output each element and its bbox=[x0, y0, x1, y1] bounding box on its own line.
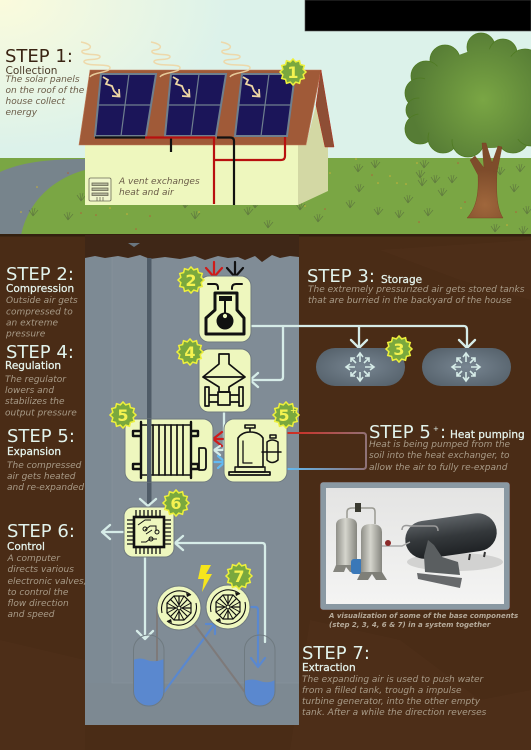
step 7 text: turbine generator, into the other empty bbox=[302, 697, 481, 707]
heat pump loop bbox=[287, 433, 366, 469]
step 2 text: STEP 2: bbox=[6, 264, 74, 285]
vessel pipes bbox=[347, 508, 375, 524]
roof bbox=[79, 70, 321, 145]
water tank right bbox=[244, 635, 275, 706]
soil blotches bbox=[0, 240, 531, 750]
icon: compressor bbox=[199, 276, 251, 342]
step 5 plus text: Heat is being pumped from the bbox=[369, 440, 511, 450]
step 5 plus text: soil into the heat exchanger, to bbox=[369, 451, 510, 461]
step 4 text: Regulation bbox=[5, 360, 61, 372]
valve and pipe bbox=[382, 542, 410, 546]
house bbox=[79, 42, 334, 205]
step 6 text: STEP 6: bbox=[7, 521, 75, 542]
step 7 text: Extraction bbox=[302, 662, 356, 674]
house side wall bbox=[298, 105, 328, 205]
step 4 text: STEP 4: bbox=[6, 342, 74, 363]
step 4 text: output pressure bbox=[5, 408, 77, 418]
photo caption: (step 2, 3, 4, 6 & 7) in a system together bbox=[329, 621, 491, 629]
step 5 text: The compressed bbox=[7, 461, 82, 471]
icon: heat exchanger bbox=[125, 419, 213, 482]
pipes to storage tanks bbox=[250, 326, 467, 380]
step 4 text: The regulator bbox=[5, 375, 67, 385]
step 1 text: house collect bbox=[6, 97, 65, 107]
step 7 text bbox=[302, 643, 487, 718]
badge 5 bbox=[110, 402, 136, 428]
step 5 plus text: + bbox=[433, 425, 439, 433]
black redaction block bbox=[305, 0, 531, 31]
central pole bbox=[147, 258, 152, 505]
soil bbox=[0, 235, 531, 750]
icon: turbine right bbox=[206, 585, 250, 629]
badge 6 bbox=[163, 490, 189, 516]
photo caption: A visualization of some of the base components bbox=[328, 612, 518, 620]
vent caption bbox=[118, 177, 200, 198]
flowers bbox=[20, 158, 517, 230]
underground bbox=[0, 234, 531, 750]
step 5 text: STEP 5: bbox=[7, 426, 75, 447]
step 2 text: Compression bbox=[6, 283, 74, 295]
step 4 text: stabilizes the bbox=[5, 397, 65, 407]
scene: sky, house, tree bbox=[0, 0, 531, 236]
badge 2: 2 bbox=[185, 271, 197, 290]
step 1 text bbox=[5, 46, 85, 118]
pole overlay through exchanger bbox=[147, 419, 152, 482]
icon: turbine left bbox=[157, 586, 201, 630]
surface line bbox=[0, 234, 531, 236]
step 2 text: Outside air gets bbox=[6, 296, 78, 306]
step 2 text: an extreme bbox=[6, 318, 58, 328]
grey return lines bbox=[150, 607, 247, 695]
tree bbox=[405, 33, 531, 218]
badge 1: 1 bbox=[287, 63, 299, 82]
step 1 text: energy bbox=[6, 108, 38, 118]
water lines bbox=[164, 624, 215, 692]
step 2 text: compressed to bbox=[6, 308, 73, 318]
badge 4: 4 bbox=[184, 343, 196, 362]
step 5 text: Expansion bbox=[7, 446, 61, 458]
wiring bbox=[95, 137, 285, 205]
floor shadow bbox=[407, 553, 503, 571]
badge 4 bbox=[177, 339, 203, 365]
step 6 text: electronic valves, bbox=[8, 577, 87, 587]
badge 6: 6 bbox=[170, 494, 182, 513]
step 5 text bbox=[7, 426, 84, 493]
icon: vent bbox=[89, 178, 111, 201]
control pipes bbox=[103, 532, 265, 642]
tree trunk bbox=[467, 143, 503, 218]
right vessel bbox=[357, 524, 387, 580]
step 6 text: to control the bbox=[8, 588, 69, 598]
step 5 plus text: : bbox=[440, 422, 446, 443]
badge 5 plus: 5 bbox=[278, 406, 290, 425]
step 5 text: and re-expanded bbox=[7, 483, 84, 493]
step 1 text: on the roof of the bbox=[6, 86, 85, 96]
badge 7 bbox=[226, 563, 252, 589]
step 6 text: directs various bbox=[8, 565, 74, 575]
step 5 plus text: Heat pumping bbox=[450, 429, 525, 441]
step 2 text bbox=[5, 264, 78, 340]
road bbox=[0, 159, 85, 236]
photo caption bbox=[328, 612, 518, 629]
badge 5 plus: + bbox=[290, 406, 297, 415]
step 5 text: air gets heated bbox=[7, 472, 76, 482]
air and water pipes bbox=[102, 262, 475, 695]
step 1 text: STEP 1: bbox=[5, 46, 73, 67]
storage tank 2 bbox=[422, 348, 511, 386]
horizontal black tank bbox=[403, 511, 499, 563]
left vessel bbox=[333, 518, 360, 572]
step 6 text: A computer bbox=[6, 554, 61, 564]
badge 2 bbox=[178, 267, 204, 293]
icon: heat pump bbox=[224, 419, 287, 482]
grass tufts bbox=[29, 160, 531, 234]
step 4 text bbox=[5, 342, 77, 418]
vent caption: heat and air bbox=[119, 188, 175, 198]
step 7 text: STEP 7: bbox=[302, 643, 370, 664]
house front wall bbox=[85, 145, 298, 205]
step 2 text: pressure bbox=[5, 330, 46, 340]
arrow heads bbox=[102, 262, 475, 639]
solar panel 3 bbox=[235, 74, 295, 136]
storage tank 1 bbox=[316, 348, 405, 386]
vent caption: A vent exchanges bbox=[118, 177, 200, 187]
badge 5: 5 bbox=[117, 406, 129, 425]
step 6 text: and speed bbox=[8, 610, 55, 620]
step 7 text: from a filled tank, trough a impulse bbox=[302, 686, 462, 696]
badge 3: 3 bbox=[393, 340, 405, 359]
icon: control chip bbox=[124, 507, 174, 557]
regulator to exchanger pipe bbox=[214, 412, 224, 450]
step 1 text: The solar panels bbox=[6, 75, 80, 85]
step 6 text: flow direction bbox=[8, 599, 69, 609]
step 4 text: lowers and bbox=[5, 386, 54, 396]
step 5 plus text: allow the air to fully re-expand bbox=[369, 463, 508, 473]
badge 1 bbox=[280, 59, 306, 85]
shaft bbox=[85, 235, 299, 725]
tree canopy bbox=[405, 33, 531, 157]
photo: system visualization bbox=[320, 482, 510, 610]
step 3 text: Storage bbox=[381, 274, 422, 286]
compressor skid bbox=[417, 540, 462, 588]
step 7 text: The expanding air is used to push water bbox=[302, 675, 485, 685]
grass bbox=[0, 158, 531, 236]
step 1 text: Collection bbox=[6, 65, 57, 77]
blue motor bbox=[351, 559, 363, 574]
step 3 text: The extremely pressurized air gets stored tanks bbox=[308, 285, 525, 295]
badge 3 bbox=[386, 336, 412, 362]
roof gable bbox=[316, 70, 334, 147]
step 5 plus text bbox=[369, 422, 525, 473]
step 6 text: Control bbox=[7, 541, 45, 553]
water tank left bbox=[133, 635, 164, 706]
icon: regulator bbox=[199, 349, 251, 412]
step 6 text bbox=[6, 521, 87, 620]
solar panel 1 bbox=[95, 74, 156, 136]
step 3 text bbox=[307, 266, 525, 306]
step 7 text: tank. After a while the direction reverses bbox=[302, 708, 487, 718]
step 5 plus text: STEP 5 bbox=[369, 422, 431, 443]
solar panel 2 bbox=[165, 74, 226, 136]
step 3 text: that are burried in the backyard of the house bbox=[308, 296, 512, 306]
badge 5 plus bbox=[273, 402, 299, 428]
sunlight rays bbox=[81, 42, 260, 96]
sky bbox=[0, 0, 531, 160]
badge 7: 7 bbox=[233, 567, 245, 586]
step 3 text: STEP 3: bbox=[307, 266, 375, 287]
icon: lightning bbox=[198, 565, 212, 592]
